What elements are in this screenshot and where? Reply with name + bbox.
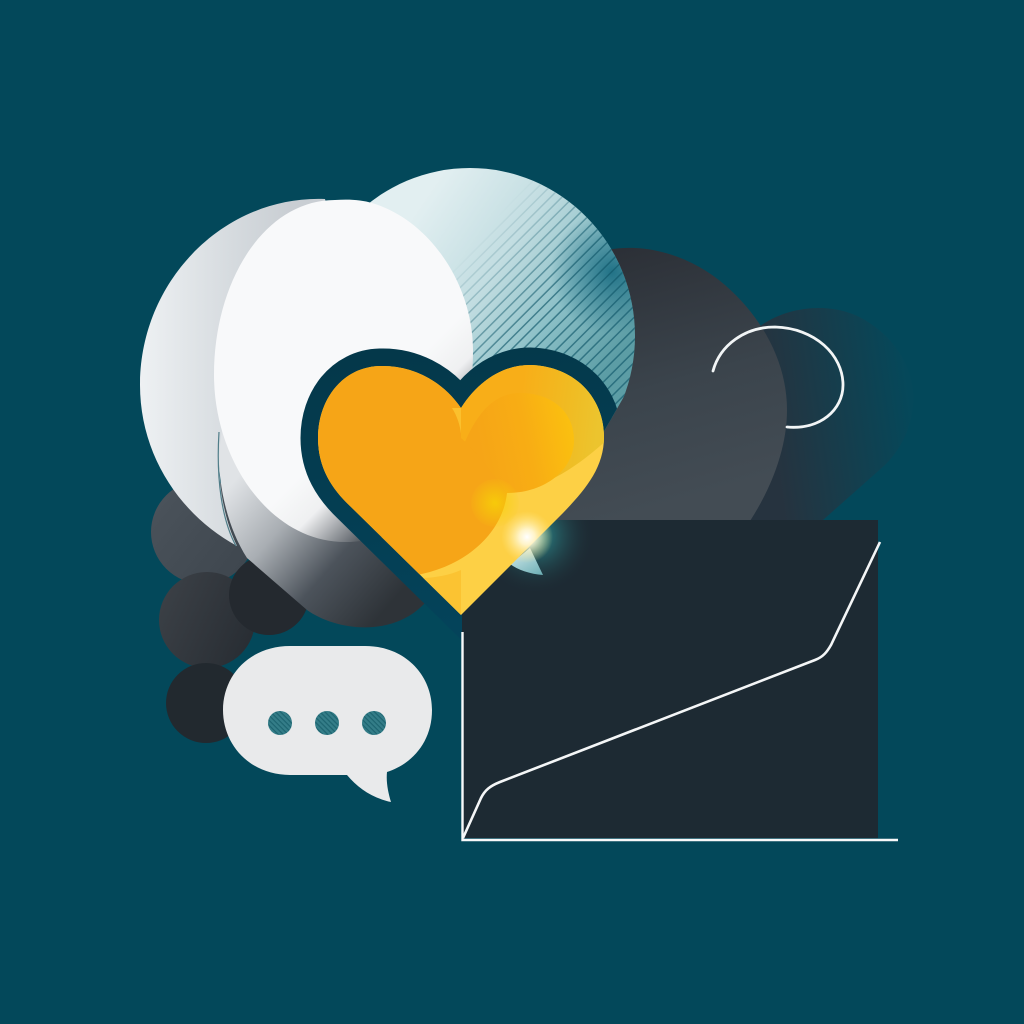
teal glow xyxy=(470,520,595,595)
circle: charcoal lower xyxy=(166,663,246,743)
arc line xyxy=(713,327,843,427)
sparkle xyxy=(501,511,553,563)
circle: charcoal middle xyxy=(159,572,255,668)
dot 1 xyxy=(268,711,292,735)
circle: charcoal right xyxy=(229,555,309,635)
blob: gradient tail xyxy=(218,420,470,627)
chart panel xyxy=(462,520,878,838)
dot 2 xyxy=(315,711,339,735)
speech balloon: white xyxy=(214,200,473,542)
heart outline xyxy=(318,365,604,615)
dot 3 xyxy=(362,711,386,735)
blob: dark large cloud xyxy=(530,248,787,521)
thin outline on balloon xyxy=(218,432,236,546)
blob: dark right cloud xyxy=(700,308,913,520)
chart trend line xyxy=(463,542,880,838)
balloon tail xyxy=(510,548,543,575)
heart xyxy=(310,360,610,615)
speech balloon: light grey xyxy=(140,199,340,546)
chart axes xyxy=(462,632,898,840)
circle: grey upper left xyxy=(151,480,255,584)
heart shading xyxy=(310,360,610,615)
speech balloon: teal hatched xyxy=(370,168,635,431)
heart fill xyxy=(318,365,604,615)
speech bubble with dots xyxy=(223,646,432,802)
